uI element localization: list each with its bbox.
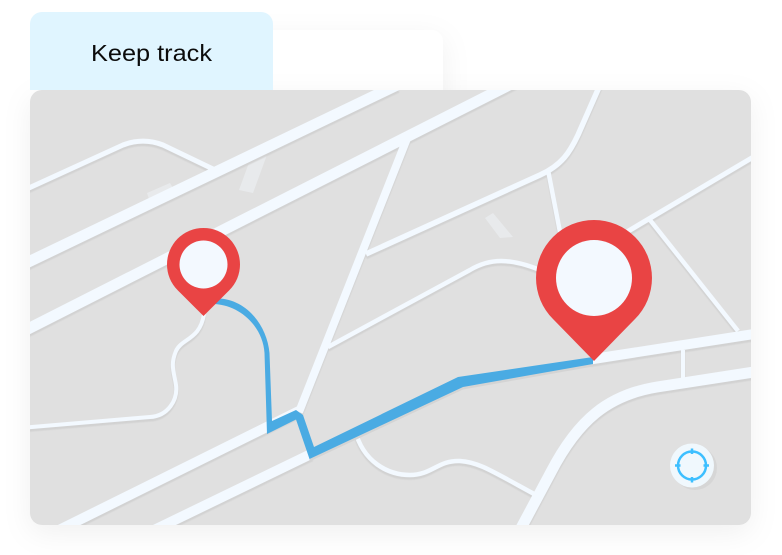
route line	[215, 298, 593, 462]
icon: crosshair	[675, 448, 709, 482]
road network	[20, 82, 760, 532]
map	[20, 82, 760, 532]
light building patches	[147, 152, 513, 238]
destination pin	[536, 220, 652, 361]
map panel shadow	[30, 90, 751, 525]
start pin	[167, 228, 240, 316]
back tab card	[200, 30, 443, 120]
locate button	[670, 444, 717, 490]
active tab: keep track	[30, 12, 273, 90]
tab label: Keep track	[91, 40, 213, 66]
